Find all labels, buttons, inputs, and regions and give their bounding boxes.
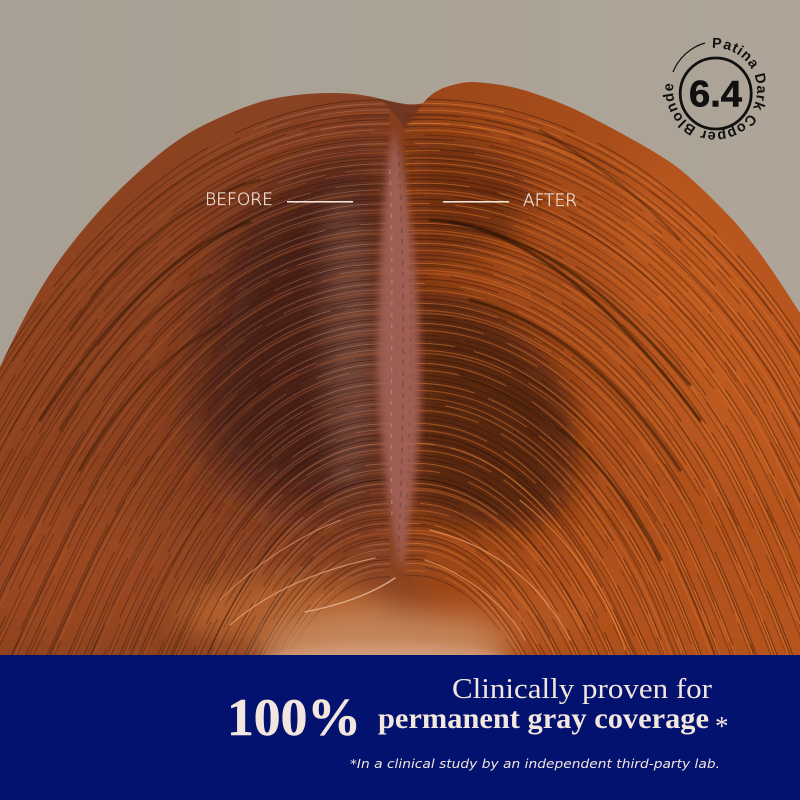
- after label with line: AFTER: [523, 191, 577, 211]
- badge: shade 6.4 Patina Dark Copper Blonde: [662, 38, 766, 140]
- bottom claim banner: [0, 655, 800, 800]
- forehead baby hairs: [220, 500, 625, 650]
- badge thin arc: [673, 43, 705, 72]
- stat: 100%: 100%: [227, 689, 361, 747]
- gray root glints: [191, 104, 390, 655]
- badge curved label: Patina Dark Copper Blonde: [662, 38, 766, 140]
- footnote: *In a clinical study by an independent third-party lab.: [350, 756, 720, 771]
- tonal shading: [0, 134, 800, 650]
- headline line 2: permanent gray coverage: [378, 702, 709, 735]
- before label with line: BEFORE: [205, 190, 273, 210]
- badge ring: [680, 58, 751, 129]
- forehead skin: [248, 596, 522, 655]
- top crown tuft: [380, 99, 422, 128]
- dense strand texture: left side: [0, 99, 390, 655]
- asterisk: *: [715, 711, 728, 741]
- hair base: [0, 80, 800, 660]
- hair photo illustration: [0, 82, 800, 655]
- dense strand texture: right side: [405, 98, 800, 655]
- scalp parting: [378, 128, 420, 572]
- after label with line: [443, 191, 577, 211]
- dark accent strands: [40, 130, 700, 560]
- headline line 1: Clinically proven for: [452, 674, 713, 705]
- long continuous strands: [0, 114, 800, 655]
- badge number: 6.4: [689, 74, 742, 114]
